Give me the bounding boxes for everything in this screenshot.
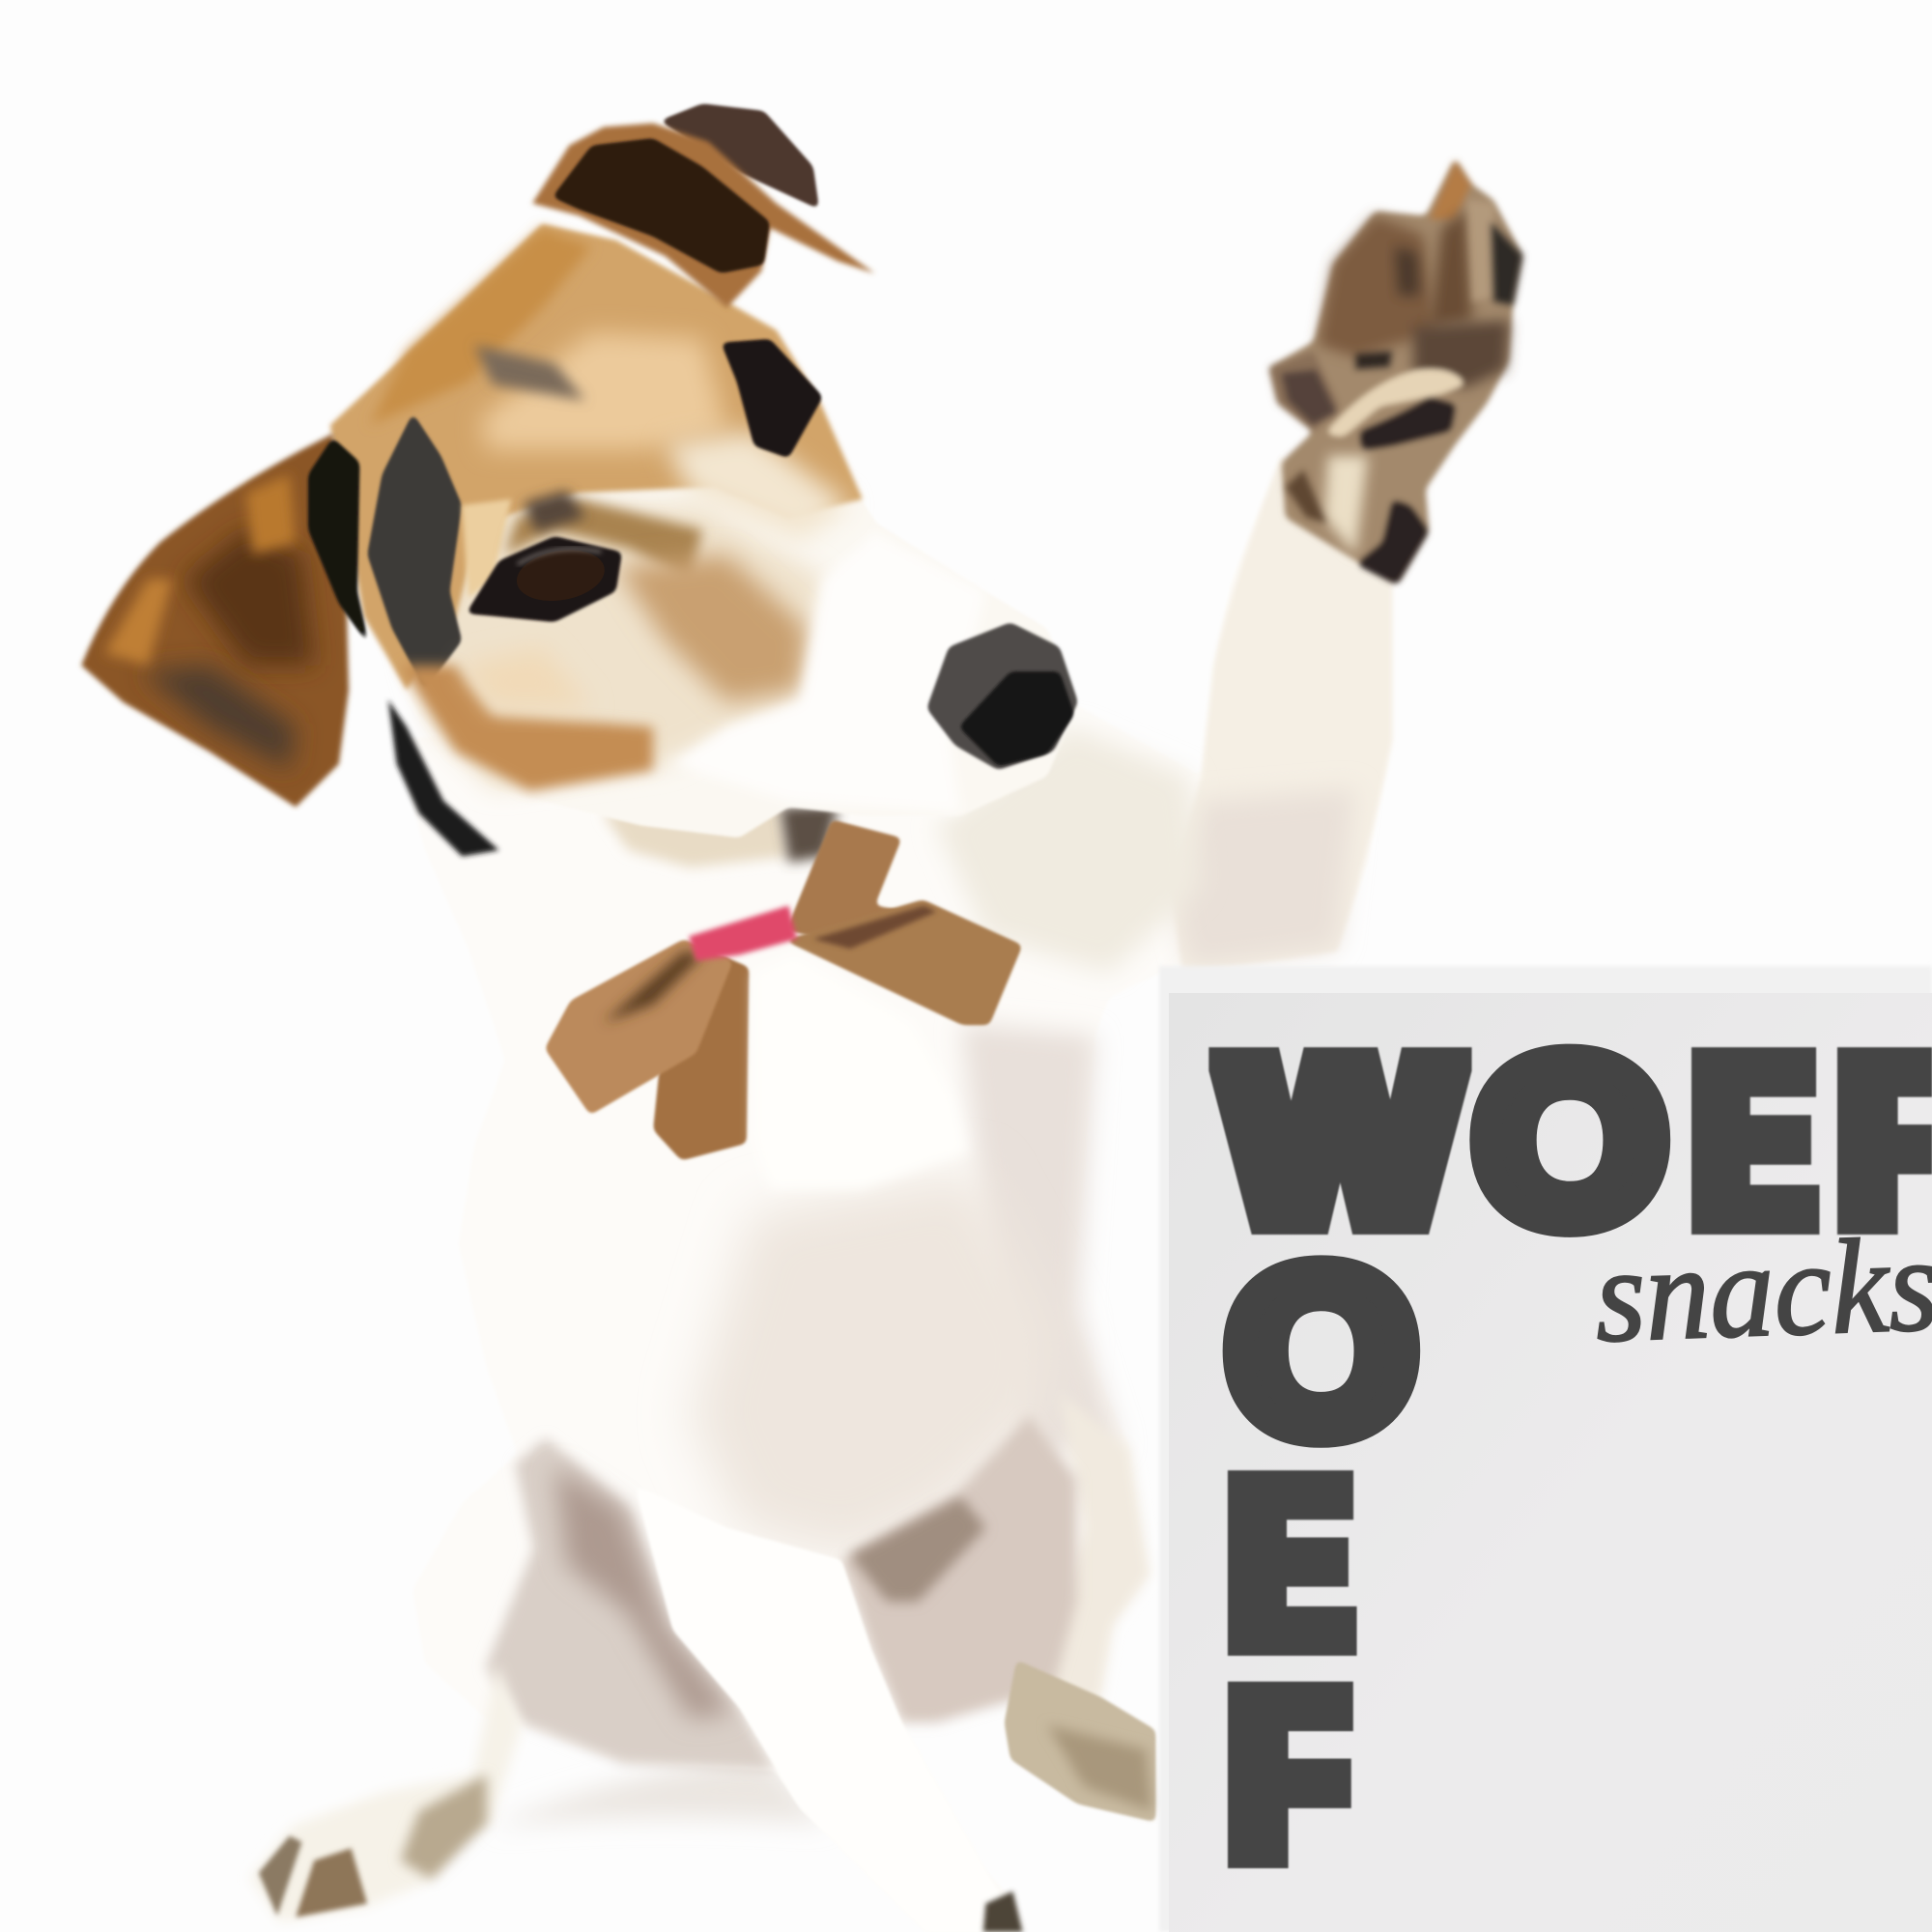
front paw toes xyxy=(983,1891,1023,1932)
ear dark base xyxy=(308,438,370,647)
dog illustration xyxy=(81,103,1523,1932)
paw dark spot xyxy=(1355,352,1392,370)
paw mid toe xyxy=(1430,210,1472,327)
eye side grey patch xyxy=(367,412,462,690)
right wing dark crease xyxy=(813,905,936,949)
dog head xyxy=(330,224,1078,838)
brow fur xyxy=(524,491,585,532)
hind foot toes xyxy=(1047,1725,1152,1811)
left belly xyxy=(486,1438,775,1771)
forehead tan xyxy=(330,224,863,690)
upper head orange xyxy=(370,228,591,425)
neck and shoulder shading xyxy=(936,727,1202,974)
forehead smudge xyxy=(474,345,585,401)
under chin dark xyxy=(780,802,839,863)
rear leg xyxy=(250,1663,522,1922)
cheek tan lower xyxy=(401,666,653,791)
lower wing xyxy=(653,955,750,1161)
front leg xyxy=(635,1485,1023,1932)
paw cream band xyxy=(1324,369,1466,438)
paw dark band xyxy=(1359,397,1457,451)
right wing xyxy=(783,899,1023,1025)
ear orange xyxy=(246,474,296,554)
rear paw toes xyxy=(259,1775,487,1918)
forehead black patch xyxy=(721,339,823,458)
left belly shadow xyxy=(554,1466,733,1719)
paw main lobe xyxy=(1319,215,1435,357)
top wing xyxy=(786,819,912,943)
upper eye brown xyxy=(505,499,702,579)
forehead highlight xyxy=(480,332,727,450)
brow tan xyxy=(462,499,511,598)
title letters with straight edges: F xyxy=(1234,1642,1343,1908)
ear lower grey xyxy=(142,666,296,770)
subtitle: snacks: snacks xyxy=(1593,1208,1932,1371)
raised arm xyxy=(1171,456,1392,974)
paw dark toe xyxy=(1491,222,1523,305)
paw tan toe xyxy=(1467,200,1497,301)
paw fur band xyxy=(1413,321,1509,388)
cheek pale xyxy=(462,647,591,708)
chest lower shading xyxy=(690,1171,1060,1559)
brow pale xyxy=(666,431,850,542)
cheek tan upper xyxy=(616,554,807,702)
nose xyxy=(926,622,1078,770)
ear dark band xyxy=(185,529,314,666)
paw orange tip xyxy=(1430,160,1471,219)
paw lower fur xyxy=(1324,456,1368,554)
title letters with straight edges xyxy=(1226,1008,1932,1908)
title letters with straight edges: E xyxy=(1234,1431,1346,1694)
bow tie xyxy=(545,819,1023,1161)
raised paw xyxy=(1269,157,1523,585)
left ear xyxy=(81,434,370,807)
bow tie knot xyxy=(689,905,797,961)
title letters O: O xyxy=(1475,1012,1664,1270)
outer thigh xyxy=(1035,1392,1150,1700)
eye xyxy=(466,536,622,622)
head base xyxy=(332,224,1078,838)
muzzle white xyxy=(671,532,985,813)
title: WOEF horizontal and vertical xyxy=(1226,1008,1932,1908)
left wing dark xyxy=(604,952,702,1023)
title letters with straight edges: W xyxy=(1226,1008,1455,1274)
ground shadow xyxy=(492,1756,826,1826)
right belly shadow xyxy=(850,1497,985,1602)
grey panel xyxy=(1159,966,1932,1932)
dog body xyxy=(394,456,1392,1932)
white chest bib xyxy=(754,955,967,1189)
paw lower dark patch xyxy=(1355,499,1430,585)
title letters O: O xyxy=(1229,1223,1415,1480)
paw left patch xyxy=(1285,469,1327,524)
under chin cream xyxy=(603,801,788,867)
right flank shading xyxy=(961,1023,1122,1454)
paw dark stripe xyxy=(1395,246,1419,296)
right belly xyxy=(841,1416,1077,1722)
title letters with straight edges: E xyxy=(1698,1008,1808,1274)
paw small lobe xyxy=(1269,352,1339,431)
arm lower shading xyxy=(1171,788,1355,967)
collar strip xyxy=(388,699,499,856)
hind foot xyxy=(1005,1660,1155,1822)
title letters O xyxy=(1229,1012,1664,1480)
cream face xyxy=(407,505,826,788)
top ear xyxy=(532,103,875,308)
left wing xyxy=(545,939,733,1115)
